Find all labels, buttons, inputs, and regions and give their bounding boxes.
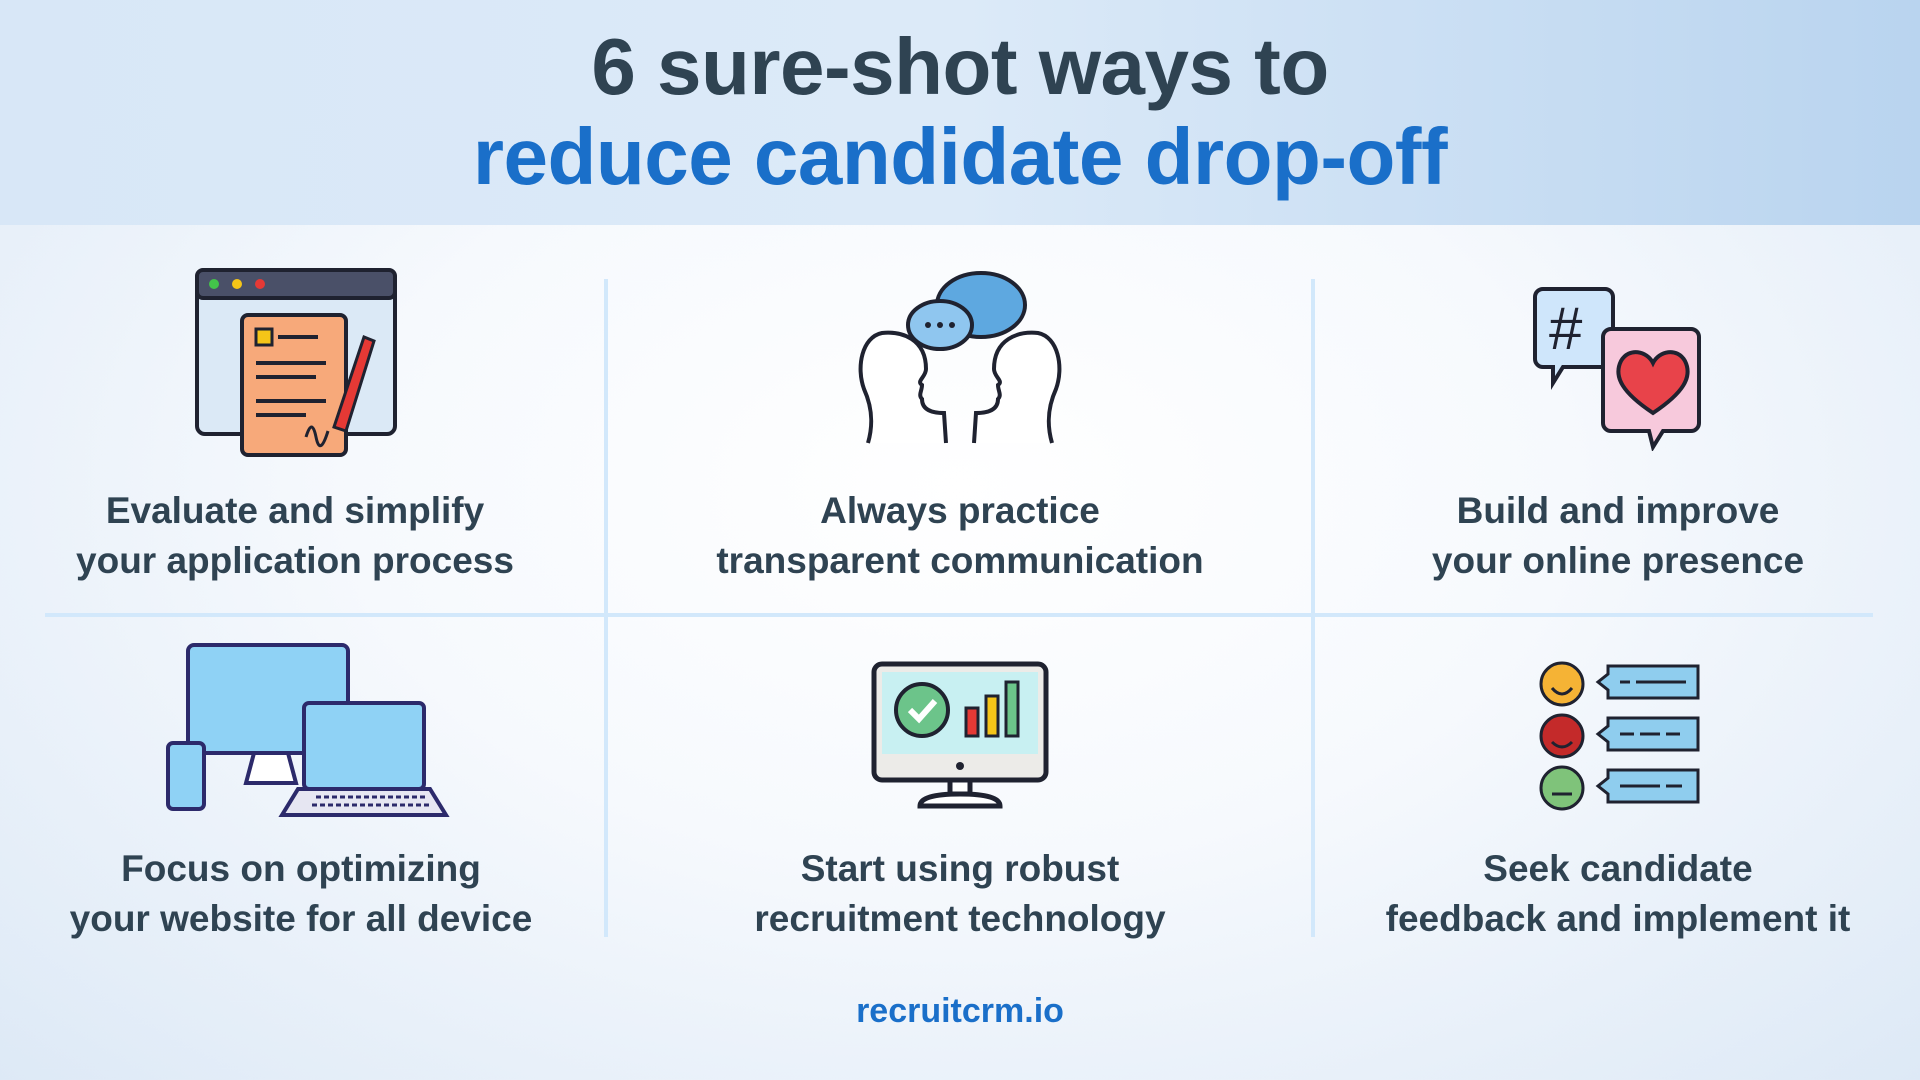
label: evaluate [76,490,514,581]
label: online presence: Build and improve [1457,490,1779,531]
label: feedback: Seek candidate [1483,848,1753,889]
icon: monitor with chart [872,662,1048,808]
header band [0,0,1920,225]
title line 1: 6 sure-shot ways to [591,22,1329,111]
title line 2: reduce candidate drop-off [473,112,1447,201]
icon: social hashtag and heart: # [1549,295,1583,362]
label: website: Focus on optimizing [121,848,481,889]
icon: social hashtag and heart [1533,287,1701,451]
icon: devices [166,643,450,817]
label: technology: Start using robust [801,848,1119,889]
label: technology [754,848,1166,939]
label: online presence: your online presence [1432,540,1804,581]
label: technology: recruitment technology [754,898,1166,939]
label: evaluate: Evaluate and simplify [106,490,484,531]
label: feedback: feedback and implement it [1386,898,1850,939]
icon: application form in browser [195,268,397,457]
label: communication: transparent communication [716,540,1204,581]
icon: two heads talking [858,271,1062,444]
label: evaluate: your application process [76,540,514,581]
label: communication: Always practice [820,490,1100,531]
label: feedback [1386,848,1850,939]
label: website [70,848,532,939]
label: communication [716,490,1204,581]
icon: feedback faces [1540,662,1700,810]
label: online presence [1432,490,1804,581]
label: website: your website for all device [70,898,532,939]
footer: recruitcrm.io [856,992,1064,1030]
